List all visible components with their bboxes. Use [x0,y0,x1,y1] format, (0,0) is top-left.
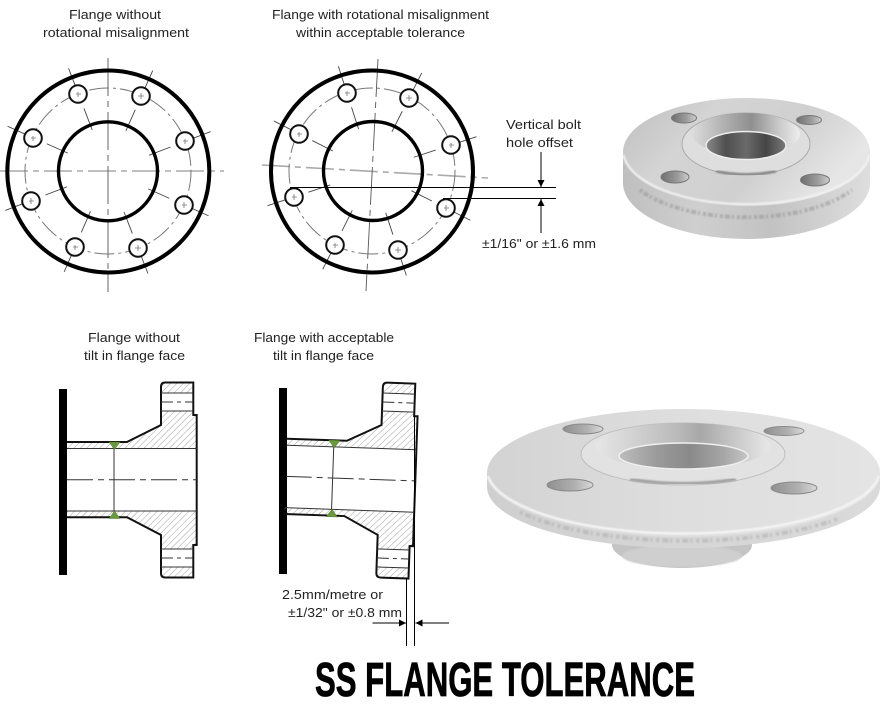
heading: flange without tilt [84,330,185,363]
welds [326,440,340,517]
arrow: tilt from right [416,622,449,624]
radial hole lines [5,68,211,273]
bore [706,132,786,160]
arrow: offset from above [540,152,542,187]
heading: flange without rotational misalignment: rotational misalignment [43,25,189,40]
heading: flange without tilt: Flange without [88,330,180,345]
photo: large stainless flange [487,409,880,568]
tilted center lines [262,59,488,291]
bolt holes [547,424,817,494]
label: offset tolerance: ±1/16" or ±1.6 mm [482,236,596,251]
tolerance witness lines [406,417,414,646]
welds [109,442,120,518]
title: SS FLANGE TOLERANCE [315,654,695,707]
label: vertical bolt hole offset [506,117,581,150]
panel: flange without tilt [59,330,197,578]
bolt circle [25,88,191,254]
reference lines for bolt hole offset [290,188,556,198]
ring shadow band [630,479,736,483]
panel: flange with rotational misalignment [262,7,596,291]
flange side wall [487,473,880,548]
hub below flange [612,530,752,568]
bolt holes [285,84,460,259]
arrow: tilt from left [372,622,406,624]
inner bore ring [58,122,158,221]
inner bore ring [324,122,422,220]
center lines [0,58,224,292]
label: tilt tolerance: ±1/32" or ±0.8 mm [288,605,402,620]
mating pipe wall [59,389,67,575]
hatched flange section [67,383,197,577]
hatching [282,380,419,578]
rim highlight [488,476,879,534]
outer flange ring [271,70,473,272]
radial hole lines [268,66,476,275]
bolt holes [661,113,830,186]
tilted flange section [282,379,419,579]
rim highlight [624,155,870,204]
heading: flange without rotational misalignment [43,7,189,40]
mating pipe wall [279,388,287,574]
inner lines [67,393,197,567]
inner lines [283,390,418,568]
heading: flange without tilt: tilt in flange face [84,348,185,363]
label: tilt tolerance: 2.5mm/metre or [282,587,384,602]
flange top face [487,409,880,537]
flange top face [623,98,870,206]
stamped markings [640,190,852,217]
outline [282,379,419,579]
raised ring [682,113,810,175]
label: tilt tolerance [282,587,402,620]
bolt circle [289,88,455,254]
label: vertical bolt hole offset: Vertical bolt [506,117,581,132]
panel: flange with acceptable tilt [254,330,449,646]
outer flange ring [7,70,209,272]
arrow: offset from below [540,199,542,233]
ring shadow band [716,171,776,175]
label: vertical bolt hole offset: hole offset [506,135,573,150]
flange side wall [623,153,870,239]
bolt holes [22,85,194,257]
flange outline [67,382,197,578]
heading: flange with rotational misalignment: within acceptable tolerance [295,25,465,40]
heading: flange with acceptable tilt [254,330,394,363]
heading: flange with rotational misalignment: Flange with rotational misalignment [272,7,489,22]
heading: flange with acceptable tilt: tilt in flange face [273,348,374,363]
heading: flange with acceptable tilt: Flange with acceptable [254,330,394,345]
raised ring [581,423,785,485]
panel: flange without rotational misalignment [0,7,224,292]
socket recess [692,113,800,155]
photo: small stainless flange [623,98,870,239]
stamped markings [520,512,840,541]
heading: flange with rotational misalignment [272,7,489,40]
heading: flange without rotational misalignment: Flange without [69,7,161,22]
bore [619,443,748,469]
socket recess [596,423,770,469]
